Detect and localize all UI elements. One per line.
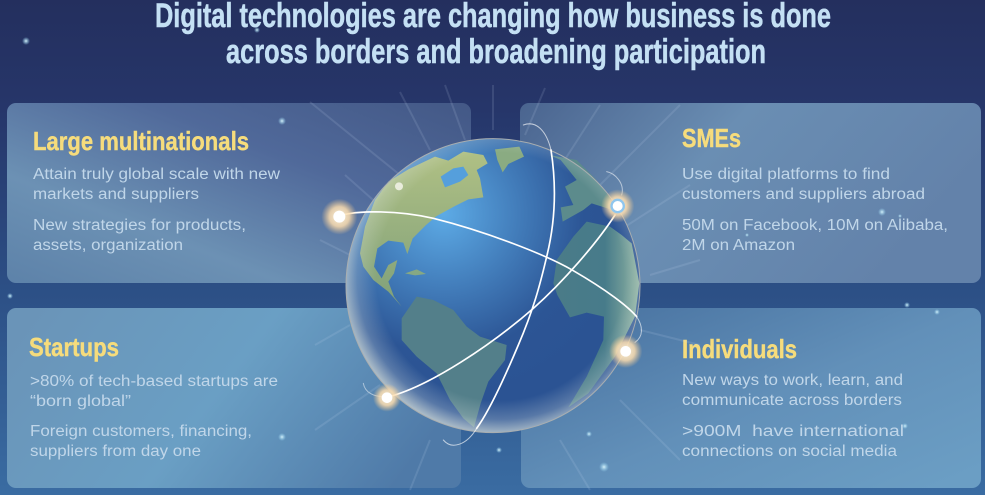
continent: south america [402,297,507,427]
atmosphere rim [346,139,640,433]
text: startups details: Foreign customers, financing, [30,423,252,440]
text: large multinationals details: New strategies for products, [33,217,246,234]
text: individuals details: >900M have international [682,423,904,440]
text: startups details: >80% of tech-based startups are [30,373,278,390]
heading: individuals: Individuals [682,334,797,364]
heading: large multinationals: Large multinationals [33,126,249,156]
text: SMEs details: 50M on Facebook, 10M on Alibaba, [682,217,948,234]
text: individuals details: connections on social media [682,443,897,460]
text: SMEs details: 2M on Amazon [682,237,795,254]
text: large multinationals details [33,166,281,254]
text: large multinationals details: markets and suppliers [33,186,199,203]
panel: individuals [521,308,981,488]
node: north america [321,199,357,235]
text: SMEs details [682,166,948,254]
continent: africa [553,222,639,407]
continent: europe [549,155,613,222]
node: europe [601,189,634,223]
node: small canada [395,182,403,190]
panel: large multinationals [7,103,471,283]
text: SMEs details: Use digital platforms to find [682,166,890,183]
text: individuals details: communicate across borders [682,392,902,409]
arcs [339,124,641,445]
text: large multinationals details: assets, organization [33,237,183,254]
heading: startups: Startups [29,332,119,362]
text: individuals details [682,372,904,460]
heading: SMEs: SMEs [682,123,741,153]
text: individuals details: New ways to work, learn, and [682,372,903,389]
panel: SMEs [520,103,981,283]
text: startups details: suppliers from day one [30,443,201,460]
text: large multinationals details: Attain truly global scale with new [33,166,281,183]
node: africa [609,335,642,368]
continent: greenland [495,147,524,172]
hudson bay [441,167,468,187]
title [155,0,831,71]
node: south america [373,384,401,412]
panel: startups [7,308,461,488]
text: SMEs details: customers and suppliers abroad [682,186,925,203]
globe [321,124,642,445]
continent: north america [360,152,488,307]
text: startups details: “born global” [30,393,131,410]
title: across borders and broadening participation [226,33,766,71]
text: startups details [30,373,278,460]
continent: caribbean [405,269,426,275]
